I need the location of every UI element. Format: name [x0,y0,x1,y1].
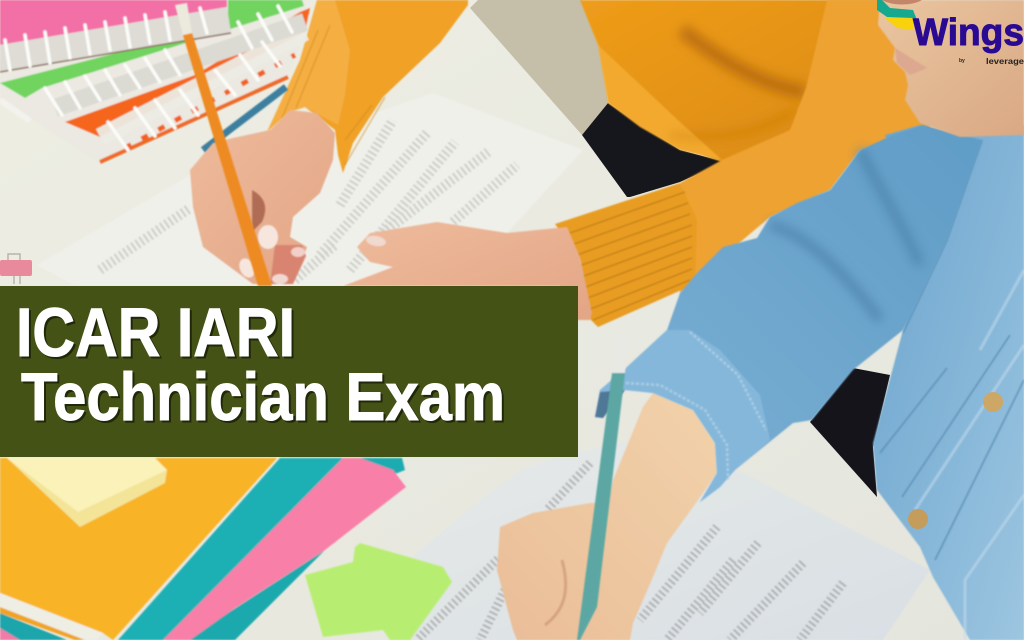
logo byline leverage: leverage [986,57,1024,66]
back teal cover [0,613,67,640]
pink book [163,458,406,640]
yellow book pages [0,593,103,640]
hand: upper left holding pencil [190,110,335,284]
upper lip hint [882,0,922,4]
banner title line two: Technician Exam [21,359,505,435]
paper clip pink [0,254,32,284]
floor behind desk [470,0,608,135]
denim sleeve [595,125,982,502]
shirt button upper [983,392,1003,412]
dark gap between child's arm and shirt [810,368,890,497]
dark trousers behind desk [582,103,725,197]
spiral bindings [5,6,292,150]
sticky note pad [7,458,167,527]
stack base [0,0,310,162]
logo swoosh [877,0,917,30]
pink book corner [0,628,20,640]
logo wordmark: Wings [913,12,1024,54]
orange pencil [175,3,272,286]
left sleeve with cuff [267,0,468,173]
paper: lower answer sheet [400,440,930,640]
logo byline by: by [959,58,965,64]
logo [877,0,1024,66]
shirt button lower [908,509,928,529]
pink notebook [0,0,231,72]
child's forearm and hand [497,393,717,640]
denim shirt front [873,125,1024,640]
green notebook [0,0,305,121]
hand: upper right flat on paper [343,222,592,320]
orange sweater body [580,0,880,162]
teal book [118,458,343,640]
back teal book tip [360,458,405,474]
orange notebook [65,8,310,162]
notebooks stack top left [0,0,310,162]
teal pencil [577,337,629,640]
child's face chin [878,0,1024,137]
green arrow sticky note [305,543,452,640]
bottom left books [0,458,406,640]
lower teal book [186,550,325,640]
orange upper arm and right sleeve [680,0,930,293]
blue pencil under notebooks [203,87,286,150]
banner [0,286,578,457]
paper: upper answer sheet [37,93,583,286]
right sleeve cuff [555,183,697,327]
yellow book [0,458,277,640]
yellow book back cover [0,607,85,640]
lower lip [895,48,927,75]
banner title line one: ICAR IARI [16,294,295,371]
